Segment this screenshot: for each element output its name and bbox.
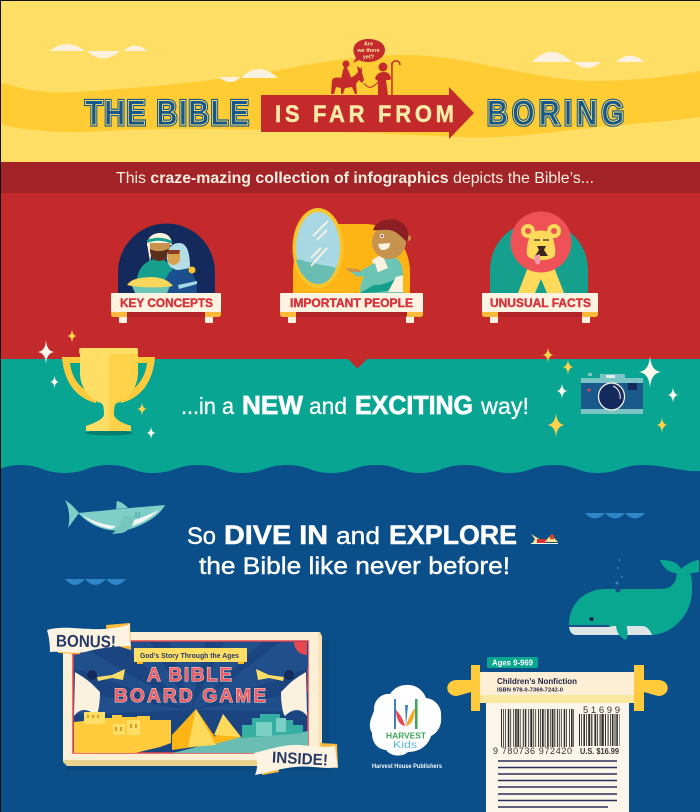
isbn: ISBN 978-0-7369-7242-0	[497, 688, 563, 694]
text: dive in and explore: EXPLORE	[389, 520, 517, 550]
title: the bible: THE BIBLE	[85, 93, 249, 133]
barcode	[493, 705, 620, 756]
mirror	[292, 208, 344, 288]
scroll roller	[447, 665, 668, 711]
ages tag	[487, 657, 538, 668]
speech bubble: are we there yet: yet?	[363, 54, 375, 60]
smiling man	[345, 219, 411, 293]
icon: shark	[65, 500, 165, 534]
book category: Children’s Nonfiction	[497, 676, 577, 686]
barcode: 51699	[583, 705, 620, 716]
game title	[114, 665, 266, 707]
silhouette: donkey riders	[331, 60, 400, 95]
game cover art	[73, 641, 308, 753]
speech bubble: are we there yet: Are	[364, 42, 373, 48]
icon: camera	[581, 373, 643, 414]
text: new and exciting way: way!	[480, 393, 529, 419]
text: new and exciting way: and	[309, 393, 347, 419]
logo: harvest kids: Kids	[393, 740, 417, 751]
text: dive in and explore: DIVE IN	[224, 520, 328, 550]
panel: yellow desert header	[0, 0, 700, 163]
banner: inside	[254, 743, 338, 775]
arch: orange	[293, 224, 410, 293]
icon: trophy	[62, 348, 155, 436]
text lines	[498, 761, 617, 807]
text: dive in and explore	[187, 520, 517, 580]
icon: swimmer	[531, 534, 558, 544]
plaque: important people	[280, 293, 423, 323]
text: dive in and explore: the Bible like never before!	[199, 553, 510, 580]
text: new and exciting way: EXCITING	[355, 390, 473, 420]
speech bubble: are we there yet	[353, 39, 385, 63]
banner: bonus	[47, 623, 131, 654]
ages tag: Ages 9-969	[492, 658, 534, 668]
plaque: game subtitle: God’s Story Through the Ages	[140, 653, 239, 660]
logo: harvest kids	[370, 685, 441, 756]
sand dune	[0, 55, 700, 137]
icon: whale	[569, 559, 699, 640]
plaque: unusual facts: UNUSUAL FACTS	[490, 296, 591, 310]
banner: inside: INSIDE!	[272, 750, 328, 769]
barcode: U.S. $16.99	[580, 747, 620, 756]
text: dive in and explore: So	[187, 523, 216, 550]
subtitle band: This craze-mazing collection of infographics depicts the Bible’s...	[116, 170, 594, 187]
board game box	[63, 632, 329, 771]
text: dive in and explore: and	[336, 523, 380, 550]
notch pointer	[348, 359, 367, 368]
plaque: key concepts: KEY CONCEPTS	[120, 296, 213, 310]
angels	[74, 672, 100, 716]
publisher name: Harvest House Publishers	[372, 763, 442, 770]
lion	[510, 212, 572, 293]
game title: A BIBLE	[147, 665, 232, 686]
text: new and exciting way: ...in a	[181, 393, 234, 419]
text: new and exciting way: NEW	[242, 390, 303, 420]
text: new and exciting way	[181, 390, 529, 420]
panel: teal section	[0, 359, 700, 475]
plaque: important people: IMPORTANT PEOPLE	[290, 296, 413, 310]
subtitle band	[0, 162, 700, 193]
arch: navy	[118, 224, 215, 293]
arch: teal	[490, 221, 588, 293]
arrow banner	[261, 87, 474, 139]
card: important people	[280, 208, 423, 323]
paper	[486, 703, 629, 812]
title: the bible: THE BIBLE	[85, 93, 249, 133]
sparkles around camera	[542, 347, 679, 438]
card: key concepts	[111, 224, 221, 323]
nativity figures	[127, 233, 197, 293]
panel: ocean	[0, 465, 700, 812]
banner: bonus: BONUS!	[56, 631, 116, 652]
barcode: 9 780736 972420	[493, 746, 572, 756]
title: boring: BORING	[487, 93, 624, 133]
city and pyramids	[172, 731, 308, 753]
small waves	[65, 513, 645, 585]
title: boring: BORING	[487, 93, 624, 133]
logo: harvest kids: HARVEST	[386, 730, 427, 740]
panel: red section	[0, 162, 700, 360]
sparkles around trophy	[38, 329, 156, 440]
plaque: game subtitle	[134, 648, 247, 664]
clouds	[50, 44, 644, 82]
card: unusual facts	[482, 212, 598, 323]
game title: BOARD GAME	[114, 686, 266, 707]
arrow banner: IS FAR FROM	[275, 100, 454, 127]
speech bubble: are we there yet: we there	[356, 48, 380, 54]
scroll with barcode	[447, 657, 668, 812]
